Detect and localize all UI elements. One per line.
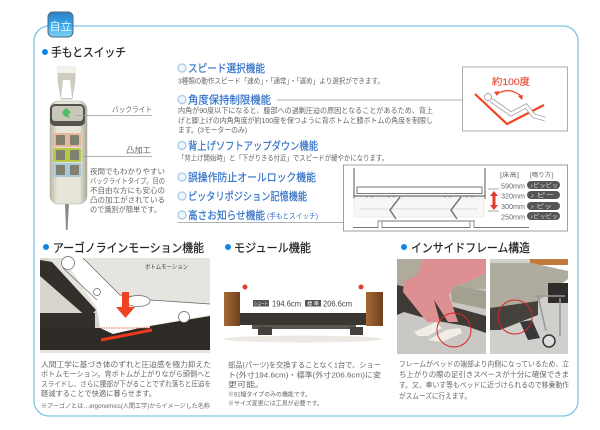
- hand switch description: 凸の加工がされている: [90, 196, 165, 204]
- text: ergonomic motion description: [41, 360, 211, 410]
- text: modular description: [228, 360, 381, 408]
- diagram: bed height: [床高]: [500, 171, 519, 179]
- heading: モジュール機能: モジュール機能: [234, 241, 311, 255]
- diagram: bed height: ♪ ピッ: [530, 204, 552, 210]
- diagram: bed height: 320mm: [501, 192, 525, 200]
- feature: height notice: [178, 208, 344, 222]
- heading: インサイドフレーム構造: インサイドフレーム構造: [411, 241, 530, 255]
- hand switch description: [90, 167, 165, 214]
- label: 凸加工: [83, 145, 152, 156]
- feature: angle limit: げと脚上げの内角角度が約100度を保つように背ボトムと膝ボトムの角度を制限し: [178, 116, 433, 125]
- photo: modular bed: 194.6cm: [272, 300, 301, 308]
- hand switch description: バックライトタイプ。目の: [90, 176, 165, 186]
- feature: all lock: 誤操作防止オールロック機能: [188, 170, 316, 184]
- heading: アーゴノラインモーション機能: アーゴノラインモーション機能: [53, 240, 204, 255]
- text: inside frame description: [399, 360, 569, 400]
- text: inside frame description: ち上がりの際の足引きスペースが十分に確保できま: [399, 370, 569, 379]
- diagram: bed height: [鳴り方]: [530, 171, 553, 179]
- label: バックライト: バックライト: [112, 105, 152, 114]
- photo: modular bed: 206.6cm: [323, 300, 352, 308]
- tab: 自立: [48, 12, 73, 37]
- feature: angle limit: 内角が90度以下になると、腹部への過剰圧迫の原因となることがあるため、背上: [178, 106, 433, 115]
- feature: soft up-down: 「背上げ開始時」と「下がりきる付近」でスピードが緩やかになります。: [178, 154, 388, 162]
- feature: position memory: [178, 189, 307, 203]
- hand switch illustration: [50, 67, 87, 230]
- label: 凸加工: 凸加工: [126, 145, 151, 155]
- photo: modular bed: ショート: [254, 302, 268, 308]
- feature: soft up-down: 背上げソフトアップダウン機能: [188, 138, 318, 152]
- diagram: bed height: ♪ ピー: [530, 192, 554, 200]
- hand switch description: 夜間でもわかりやすい: [90, 167, 165, 176]
- photo: wheelchair: [490, 259, 568, 354]
- text: modular description: 部品(パーツ)を交換することなく1台で、ショー: [228, 360, 381, 370]
- text: ergonomic motion description: スライドし、さらに腰部が下がることでずれ落ちと圧迫を: [41, 380, 211, 388]
- feature: speed selection: スピード選択機能: [188, 61, 265, 75]
- text: modular description: ※サイズ変更には工具が必要です。: [228, 400, 323, 408]
- text: inside frame description: す。又、車いす等もベッドに近づけられるので移乗動作: [399, 380, 569, 390]
- feature: position memory: ピッタリポジション記憶機能: [188, 189, 307, 203]
- photo: modular bed: 標 準: [307, 300, 319, 308]
- feature: angle limit: [178, 92, 463, 134]
- feature: height notice: 高さお知らせ機能: [188, 208, 265, 222]
- text: ergonomic motion description: 軽減することで快適に暮らせます。: [41, 389, 156, 398]
- photo: bottom motion: ボトムモーション: [145, 263, 188, 271]
- text: modular description: ト(外寸194.6cm)・標準(外寸206.6cm)に変: [228, 370, 381, 380]
- photo: seated person: [397, 259, 486, 354]
- heading: 手もとスイッチ: 手もとスイッチ: [51, 46, 126, 60]
- feature: angle limit: 角度保持制限機能: [188, 92, 271, 106]
- feature: height notice: (手もとスイッチ): [267, 212, 318, 220]
- feature: speed selection: [178, 61, 384, 86]
- photo: modular bed: [223, 284, 383, 342]
- diagram: bed height: 590mm: [501, 182, 525, 190]
- diagram: bed height: 250mm: [501, 212, 525, 222]
- text: ergonomic motion description: 人間工学に基づき体のずれと圧迫感を極力抑えた: [41, 360, 211, 369]
- photo: bottom motion: [40, 256, 210, 353]
- text: modular description: ※91幅タイプのみの機能です。: [228, 390, 311, 398]
- text: ergonomic motion description: ボトムモーション。背ボトムが上がりながら頭側へと: [41, 370, 211, 378]
- text: modular description: 更可能。: [228, 380, 264, 389]
- diagram: 100 degree angle: 約100度: [492, 76, 531, 88]
- hand switch description: ので識別が簡単です。: [90, 205, 161, 214]
- label: バックライト: [76, 105, 152, 116]
- text: ergonomic motion description: ※アーゴノとは…ergonomics(人間工学)からイメージした名称: [41, 402, 210, 410]
- text: inside frame description: フレームがベッドの端部より内側になっているため、立: [399, 360, 569, 368]
- diagram: bed height: ♪ピッピッ: [530, 182, 558, 190]
- feature: soft up-down: [178, 138, 388, 162]
- diagram: bed height: ♪ピッピッ: [530, 214, 558, 220]
- feature: speed selection: 3種類の動作スピード「速め」・「通常」・「遅め」より選択ができます。: [178, 76, 384, 86]
- diagram: bed height: [344, 165, 568, 231]
- diagram: 100 degree angle: [462, 67, 568, 131]
- diagram: bed height: 300mm: [501, 202, 525, 211]
- hand switch description: 不自由な方にも安心の: [90, 186, 165, 195]
- feature: angle limit: ます。(3モーターのみ): [178, 126, 247, 134]
- tab: 自立: 自立: [50, 19, 72, 33]
- text: inside frame description: がスムーズに行えます。: [399, 392, 471, 400]
